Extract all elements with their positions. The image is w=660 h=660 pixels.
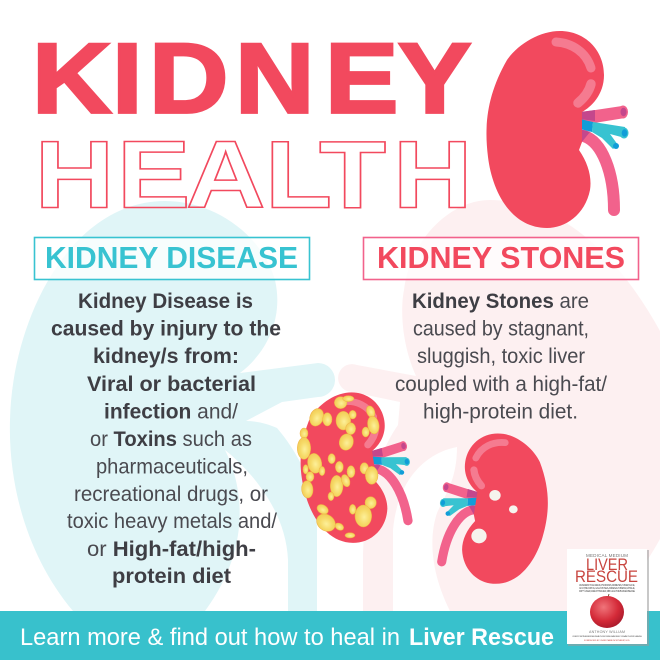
text block: kidney stones description: Kidney Stones are xyxy=(412,290,589,313)
text block: kidney disease description: caused by injury to the xyxy=(51,318,281,340)
text block: kidney disease description: infection and/ xyxy=(104,400,238,424)
text block: kidney stones description: sluggish, toxic liver xyxy=(417,345,585,368)
book cover: Liver Rescue: LIVER xyxy=(586,556,628,574)
text block: kidney disease description: pharmaceuticals, xyxy=(96,456,248,478)
text block: kidney disease description: or High-fat/high- xyxy=(87,538,256,561)
book cover: Liver Rescue: FOREWORD BY CHRISTIANE NORTHRUP, M.D. xyxy=(584,639,630,642)
title: HEALTH outline: HEALTH xyxy=(35,121,472,228)
panel: kidney stones heading: KIDNEY STONES xyxy=(377,240,625,275)
book cover: Liver Rescue xyxy=(567,549,649,646)
footer banner: Liver Rescue xyxy=(409,624,554,651)
footer banner xyxy=(0,611,660,660)
yellow fat deposits xyxy=(297,396,380,538)
text block: kidney stones description xyxy=(395,290,607,424)
icon: red apple xyxy=(590,594,624,628)
book cover: Liver Rescue: FATTY LIVER, WEIGHT ISSUES, SIBO & AUTOIMMUNE DISEASE xyxy=(579,590,635,593)
background: faint pink kidney xyxy=(338,200,660,611)
text block: kidney stones description: coupled with a high-fat/ xyxy=(395,373,607,396)
panel: kidney disease heading: KIDNEY DISEASE xyxy=(45,240,298,275)
white kidney stones xyxy=(471,490,518,543)
book cover: Liver Rescue: ANSWERS TO ECZEMA, PSORIASIS, DIABETES, STREP, ACNE, xyxy=(579,584,635,587)
text block: kidney disease description: Kidney Disease is xyxy=(78,290,253,313)
book cover: Liver Rescue: RESCUE xyxy=(575,568,638,586)
title: KIDNEY: KIDNEY xyxy=(32,24,471,134)
icon: main kidney xyxy=(486,31,628,228)
text block: kidney stones description: caused by stagnant, xyxy=(413,318,589,340)
text block: kidney disease description: protein diet xyxy=(112,565,231,588)
text block: kidney disease description: toxic heavy metals and/ xyxy=(67,510,277,533)
book cover: Liver Rescue: GOUT, BLOATING, GALLSTONES, ADRENAL STRESS, FATIGUE, xyxy=(579,587,635,590)
text block: kidney disease description: or Toxins such as xyxy=(90,428,252,451)
text block: kidney stones description: high-protein diet. xyxy=(423,400,578,424)
text block: kidney disease description: recreational drugs, or xyxy=(74,483,268,506)
text block: kidney disease description: Viral or bacterial xyxy=(87,373,256,396)
book cover: Liver Rescue: MEDICAL MEDIUM xyxy=(586,553,628,558)
book cover: Liver Rescue: ANTHONY WILLIAM xyxy=(589,630,625,634)
icon: kidney with stones xyxy=(429,426,559,591)
footer banner: Learn more & find out how to heal in xyxy=(20,624,400,651)
background: faint teal kidney xyxy=(10,201,335,611)
book cover: Liver Rescue: #1 NEW YORK TIMES BEST-SELLING AUTHOR OF LIFE-CHANGING FOODS AND THYROID HEALING xyxy=(572,635,642,638)
text block: kidney disease description: kidney/s from: xyxy=(93,345,239,368)
icon: fatty kidney with yellow deposits xyxy=(290,385,421,550)
text block: kidney disease description xyxy=(51,290,281,588)
